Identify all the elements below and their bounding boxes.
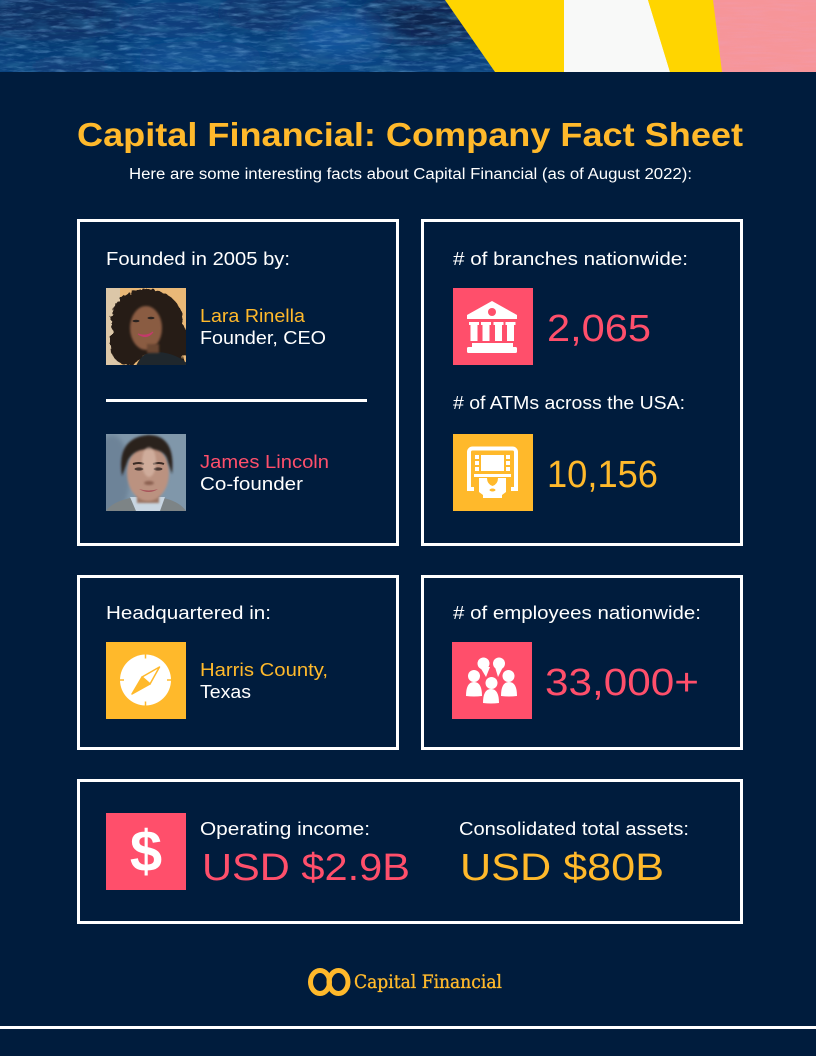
- name: James Lincoln: James Lincoln: [200, 452, 329, 472]
- HQ county: Harris County,: [200, 660, 328, 680]
- header banner: painted wood: [0, 0, 816, 78]
- logo: Capital Financial: [310, 970, 502, 994]
- icon: dollar: [106, 813, 186, 890]
- role: Founder, CEO: Founder, CEO: [200, 328, 326, 348]
- ATMs value: 10,156: [547, 454, 658, 496]
- employees label: # of employees nationwide:: [453, 603, 701, 623]
- operating income value: USD $2.9B: [202, 847, 410, 889]
- role: Co-founder: Co-founder: [200, 474, 303, 494]
- icon: people: [452, 642, 532, 719]
- panel: headquarters: [78, 576, 398, 748]
- branches value: 2,065: [547, 308, 651, 350]
- total assets label: Consolidated total assets:: [459, 819, 689, 839]
- logo wordmark: Capital Financial: [354, 971, 502, 993]
- icon: interlocking rings: [310, 970, 348, 994]
- name: Lara Rinella: Lara Rinella: [200, 306, 306, 326]
- operating income label: Operating income:: [200, 819, 370, 839]
- title: Capital Financial: Company Fact Sheet: [77, 116, 743, 153]
- total assets value: USD $80B: [460, 847, 664, 889]
- branches label: # of branches nationwide:: [453, 249, 688, 269]
- headquarters label: Headquartered in:: [106, 603, 271, 623]
- photo: James Lincoln: [106, 434, 186, 511]
- panel: branches and ATMs: [422, 220, 742, 544]
- panel: employees: [422, 576, 742, 748]
- icon: dollar: $: [130, 819, 162, 884]
- HQ state: Texas: [200, 682, 251, 702]
- founders heading: Founded in 2005 by:: [106, 249, 290, 269]
- icon: compass: [106, 642, 186, 719]
- employees value: 33,000+: [545, 662, 699, 704]
- photo: Lara Rinella: [106, 288, 190, 366]
- icon: ATM: [453, 434, 533, 511]
- panel: financials: [78, 780, 742, 922]
- panel: founders: [78, 220, 398, 544]
- subtitle: Here are some interesting facts about Capital Financial (as of August 2022):: [129, 166, 692, 183]
- ATMs label: # of ATMs across the USA:: [453, 393, 685, 413]
- icon: bank: [453, 288, 533, 365]
